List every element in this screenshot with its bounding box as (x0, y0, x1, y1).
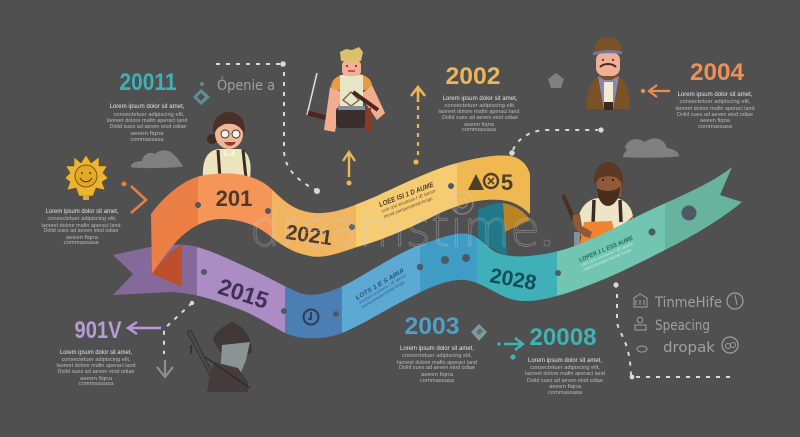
text block 20011: Lorem ipsum dolor sit amet, (110, 103, 185, 110)
text block 2004: laoreet dolore mafin aperaci land (676, 106, 755, 112)
text block 2004: Dolid sues ad aeven eiod odiae (677, 112, 753, 118)
ribbon text yellow: mend pompemantal fungo (383, 196, 434, 219)
ribbon label 201: 201 (216, 186, 252, 211)
ribbon text blue: soulam eculuua I IE lamor (358, 272, 408, 305)
text block 2002: consectetuer adipiscing elit, (444, 103, 516, 109)
ribbon text blue (355, 268, 410, 309)
ribbon segment: amber 2021 (272, 190, 356, 257)
text block 20011: Dolid sues ad aeven eiod odiae (110, 124, 187, 130)
year 2003: 2003 (404, 313, 460, 340)
text block sun: aeeen fiqna (66, 235, 98, 241)
legend: dropak (637, 337, 738, 356)
ribbon label icons and 5 (468, 170, 513, 195)
ribbon fold: red (152, 245, 182, 287)
arrow: purple left (128, 322, 161, 334)
character: worker with tools (307, 47, 385, 132)
text block sun (42, 208, 121, 246)
ribbon text mint: mend pompemantal fungo (582, 247, 633, 272)
ribbon segment: orange 201 (198, 173, 272, 238)
ribbon text yellow (378, 181, 439, 219)
year 20008: 20008 (530, 324, 596, 351)
text block 2003: commassasa (420, 378, 454, 384)
ribbon: upper band (151, 156, 530, 274)
ribbon segment: mint text (557, 203, 665, 296)
legend: TinmeHife: TinmeHife (654, 295, 722, 311)
text block 2004: aeeen fiqna (700, 118, 730, 124)
ribbon segment: purple tail (113, 244, 197, 296)
ribbon: lower band (113, 167, 742, 338)
year 20011: 20011 (120, 69, 176, 96)
text block 2002: Lorem ipsum dolor sit amet, (442, 95, 518, 102)
arrow: yellow up short (343, 152, 355, 186)
year 901V: 901V (74, 317, 122, 344)
text block 2002: aeeen fiqna (464, 122, 494, 128)
year 2002: 2002 (446, 63, 500, 90)
arrow: yellow up dashed (411, 87, 425, 165)
ribbon segment: blue clock (285, 286, 342, 338)
text block 2003: laoreet dolore mafin aperaci land (397, 360, 477, 366)
dashed connector top (216, 61, 320, 194)
ribbon text blue: LOTS 1 E S ARUI (355, 268, 405, 302)
text block 20008: commassasa (548, 390, 582, 396)
ribbon dots (195, 183, 696, 317)
text block sun: Lorem ipsum dolor sit amet, (46, 208, 119, 215)
ribbon segment: golden end (457, 156, 530, 214)
text block 901V: Lorem ipsum dolor sit amet, (60, 349, 132, 356)
text block 2003 (397, 345, 477, 384)
legend: Speacing (635, 317, 710, 334)
arrow: orange chevron (122, 182, 146, 213)
icon: sun (65, 155, 108, 200)
text block 2002: Dolid sues ad aeven eiod odiae (442, 115, 518, 121)
ribbon text mint: con rpn eculuua I IE lamor (580, 241, 634, 268)
text block 901V: laoreet dolore mafin aperaci land (56, 363, 136, 369)
text block 901V (56, 349, 136, 387)
text block sun: consectetuer adipiscing elit, (48, 216, 116, 222)
text block 20008: Dolid sues ad aeven eiod odiae (527, 378, 603, 384)
text block 20008 (525, 357, 605, 396)
text block 2002 (438, 95, 520, 133)
character: woman with glasses (203, 112, 251, 178)
ribbon label 2015: 2015 (215, 273, 272, 314)
dashed connector lower right (613, 282, 735, 379)
text block sun: commassasa (64, 240, 99, 246)
text block 2004: Lorem ipsum dolor sit amet, (678, 91, 753, 98)
text block 20011: consectetuer adipiscing elit, (114, 112, 184, 118)
text block 901V: commassasa (78, 381, 114, 387)
dashed connector lower left (164, 301, 194, 354)
text block 2003: aeeen fiqna (421, 372, 453, 378)
ribbon label 2028: 2028 (488, 264, 538, 295)
arrow: teal right (497, 338, 523, 360)
ribbon segment: teal 2028 (477, 238, 557, 301)
text block 20008: Lorem ipsum dolor sit amet, (528, 357, 602, 364)
icon: clock on ribbon (304, 310, 318, 324)
text block 2004: commassasa (698, 124, 732, 130)
year 2004: 2004 (690, 59, 745, 86)
text block 20011: aeeen fiqna (130, 131, 164, 137)
character: man with moustache (586, 37, 630, 110)
text block 20011: laoreet dolore mafin aperaci land (106, 118, 188, 124)
ribbon segment: lavender 2015 (197, 247, 285, 333)
ribbon text blue: mend pompemantal fungo (360, 279, 406, 309)
text block 2003: Lorem ipsum dolor sit amet, (400, 345, 474, 352)
character: hooded figure (187, 322, 252, 392)
ribbon segment: dark orange end (151, 176, 198, 274)
text block 2002: laoreet dolore mafin aperaci land (438, 109, 520, 115)
ribbon segment: mint tail (665, 167, 742, 250)
cloud left (131, 150, 183, 168)
text block 2002: commassasa (462, 127, 496, 133)
arrow: orange left (641, 85, 670, 97)
text block 20011 (106, 103, 188, 143)
ribbon text yellow: con rpn eculuua I IE lamor (381, 188, 437, 214)
text block 20011: commassasa (130, 137, 164, 143)
text block 2003: Dolid sues ad aeven eiod odiae (399, 365, 475, 371)
icon: pentagon (548, 73, 564, 88)
text block 20008: consectetuer adipiscing elit, (530, 365, 600, 371)
text block 2004 (676, 91, 755, 130)
ribbon fold: dark teal (478, 203, 507, 255)
legend: Speacing: Speacing (655, 318, 710, 334)
text block 20008: laoreet dolore mafin aperaci land (525, 371, 605, 377)
ribbon label icons and 5: 5 (501, 170, 513, 195)
legend: TinmeHife (634, 293, 743, 311)
ribbon segment: light blue text (342, 245, 420, 333)
text block sun: Dolid sues ad aeven eiod odiae (44, 228, 119, 234)
text block 2004: consectetuer adipiscing elit, (680, 99, 750, 105)
text block 2003: consectetuer adipiscing elit, (402, 353, 472, 359)
handwritten label: Ópenie a (217, 76, 275, 94)
text block sun: laoreet dolore mafin aperaci land (42, 223, 121, 229)
ribbon segment: light yellow text (356, 163, 457, 248)
character: bearded man (563, 162, 634, 246)
ribbon fold: gold (503, 203, 530, 232)
text block 20008: aeeen fiqna (549, 384, 581, 390)
legend: dropak: dropak (663, 340, 716, 356)
cloud right (623, 138, 679, 158)
icon: diamond gray-teal (471, 324, 487, 341)
ribbon text yellow: LOEE ISI 1 D AUME (378, 181, 435, 209)
text block 901V: consectetuer adipiscing elit, (62, 357, 130, 363)
watermark: dreamstime (250, 200, 540, 258)
ribbon text mint: LOPER 1 L ESS AUME (578, 235, 635, 264)
text block 901V: aeeen fiqna (80, 376, 112, 382)
arrow: gray down (157, 360, 173, 377)
text block 901V: Dolid sues ad aeven eiod odiae (58, 369, 135, 375)
ribbon segment: blue dots (420, 234, 477, 292)
ribbon label 2021: 2021 (284, 221, 334, 250)
dashed connector to man (509, 127, 604, 156)
icon: diamond teal (193, 82, 210, 105)
